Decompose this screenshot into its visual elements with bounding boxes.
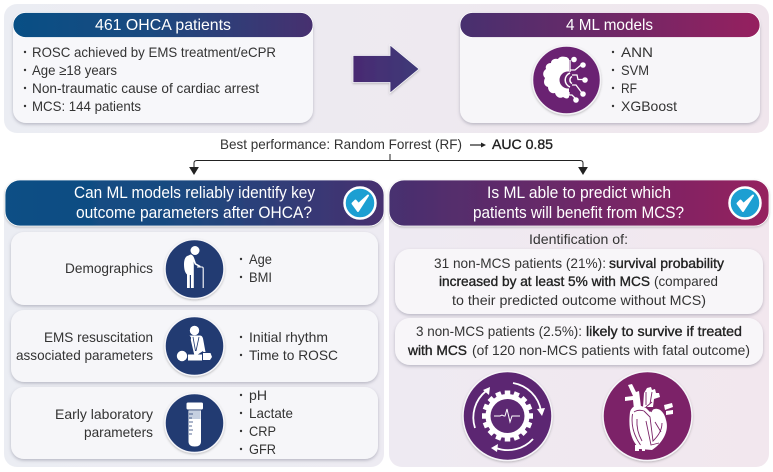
- card: 31 non-MCS patients: 31 non-MCS patients (21%):: [434, 255, 606, 271]
- icon: elderly person: [165, 240, 224, 298]
- card: 31 non-MCS patients: to their predicted outcome without MCS): [452, 292, 706, 308]
- card: 3 non-MCS patients: [395, 318, 763, 365]
- card: 31 non-MCS patients: increased by at least 5% with MCS: [439, 273, 650, 289]
- icon: heart: [603, 372, 692, 460]
- row: early laboratory: [11, 387, 378, 459]
- header: MCS benefit question: Is ML able to predict which: [487, 184, 671, 202]
- card: patients: ROSC achieved by EMS treatment/eCPR: [32, 44, 276, 60]
- card: patients: [13, 12, 313, 123]
- icon: test tube: [165, 394, 224, 452]
- card: 3 non-MCS patients: (of 120 non-MCS patients with fatal outcome): [472, 342, 750, 358]
- card: 3 non-MCS patients: 3 non-MCS patients (2.5%):: [416, 323, 582, 339]
- icon: check mark: [730, 188, 760, 218]
- card: ML models: SVM: [621, 62, 649, 78]
- header: MCS benefit question: patients will benefit from MCS?: [473, 204, 684, 222]
- icon: check mark: [344, 188, 376, 218]
- row: early laboratory: parameters: [84, 424, 153, 440]
- card: 31 non-MCS patients: survival probability: [609, 255, 724, 271]
- row: demographics: Demographics: [65, 260, 153, 276]
- arrow: split to both questions: [190, 154, 587, 174]
- header: MCS benefit question: [389, 180, 769, 226]
- row: EMS resuscitation: Initial rhythm: [249, 329, 328, 345]
- row: demographics: [11, 232, 378, 305]
- icon: CPR: [165, 316, 224, 376]
- icon: AI brain: [532, 46, 600, 114]
- card: 3 non-MCS patients: likely to survive if treated: [586, 323, 742, 339]
- row: early laboratory: Early laboratory: [55, 406, 153, 422]
- card: patients: MCS: 144 patients: [32, 98, 141, 114]
- panel: MCS benefit: [389, 180, 769, 467]
- row: early laboratory: CRP: [249, 423, 276, 439]
- row: EMS resuscitation: EMS resuscitation: [44, 329, 153, 345]
- card: ML models: XGBoost: [621, 98, 677, 114]
- row: demographics: Age: [249, 251, 272, 267]
- row: early laboratory: pH: [249, 387, 267, 403]
- card: ML models: [460, 12, 760, 123]
- card: patients: Non-traumatic cause of cardiac arrest: [32, 80, 259, 96]
- card: ML models: 4 ML models: [566, 17, 653, 34]
- card: 31 non-MCS patients: [395, 249, 763, 314]
- row: early laboratory: GFR: [249, 441, 276, 457]
- row: EMS resuscitation: Time to ROSC: [249, 347, 338, 363]
- card: patients: 461 OHCA patients: [95, 17, 231, 34]
- card: 31 non-MCS patients: (compared: [654, 273, 718, 289]
- row: early laboratory: Lactate: [249, 405, 293, 421]
- text: best performance: Best performance: Random Forrest (RF): [220, 136, 462, 152]
- row: EMS resuscitation: [11, 310, 378, 382]
- card: patients: Age ≥18 years: [32, 62, 117, 78]
- panel: study input: [4, 4, 769, 133]
- row: EMS resuscitation: associated parameters: [16, 347, 153, 363]
- row: demographics: BMI: [249, 269, 272, 285]
- text: identification of: Identification of:: [529, 231, 628, 247]
- arrow: patients to models: [353, 45, 419, 93]
- icon: gear with ECG: [463, 372, 552, 460]
- card: 3 non-MCS patients: with MCS: [407, 342, 467, 358]
- header: key outcome question: [5, 180, 384, 226]
- card: ML models: RF: [621, 80, 637, 96]
- panel: key outcome parameters: [4, 180, 384, 467]
- header: key outcome question: Can ML models reliably identify key: [74, 184, 316, 202]
- header: key outcome question: outcome parameters after OHCA?: [76, 204, 312, 222]
- text: best performance: AUC 0.85: [492, 136, 553, 152]
- card: ML models: ANN: [621, 44, 653, 60]
